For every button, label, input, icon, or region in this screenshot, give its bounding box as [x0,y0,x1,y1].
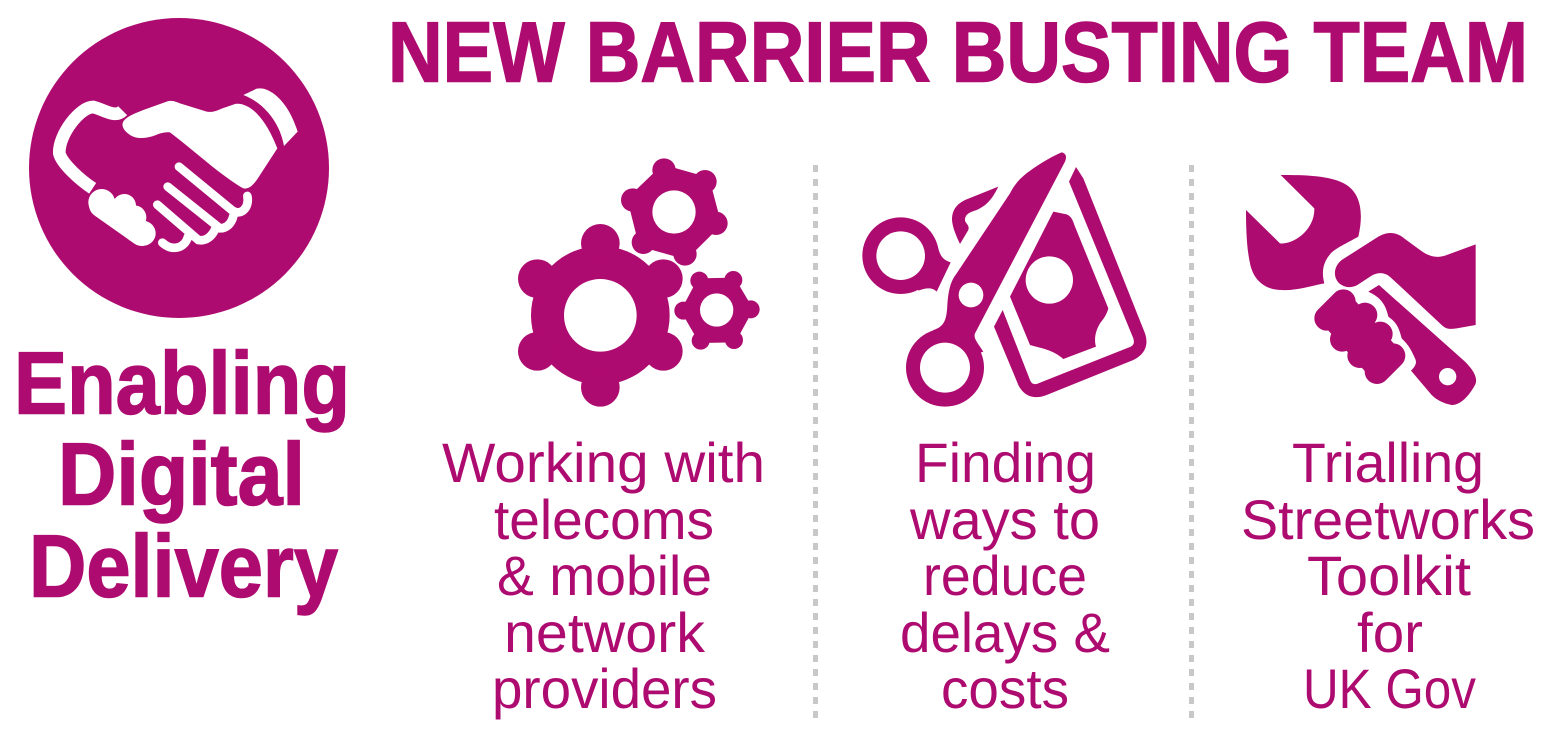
text: column 1: Working with [442,431,765,494]
text: column 1 [442,431,765,720]
heading: Enabling Digital Delivery: Digital [58,424,305,524]
text: column 1: network [504,601,706,664]
icon: hand with spanner [1246,175,1476,405]
text: column 3: Trialling [1292,431,1484,494]
text: column 2: delays & [900,601,1110,664]
text: column 1: providers [492,657,717,720]
icon: handshake in circle [29,18,329,318]
text: column 1: telecoms [494,488,714,551]
heading: Enabling Digital Delivery: Delivery [29,516,338,616]
text: column 3: Toolkit [1307,544,1471,607]
text: column 2: reduce [923,544,1087,607]
text: column 2 [900,431,1110,720]
text: column 2: costs [941,657,1069,720]
text: column 1: & mobile [497,544,712,607]
divider 1 [813,165,818,724]
text: column 2: ways to [909,488,1100,551]
text: column 3: for [1357,601,1423,664]
heading: Enabling Digital Delivery: Enabling [14,334,350,432]
icon: scissors cutting banknote [862,152,1146,407]
icon: gears [518,158,760,407]
text: column 3: UK Gov [1303,657,1476,720]
text: column 3: Streetworks [1241,488,1535,551]
heading: Enabling Digital Delivery [14,334,350,616]
text: column 2: Finding [915,431,1096,494]
divider 2 [1189,165,1194,724]
text: column 3 [1241,431,1535,720]
